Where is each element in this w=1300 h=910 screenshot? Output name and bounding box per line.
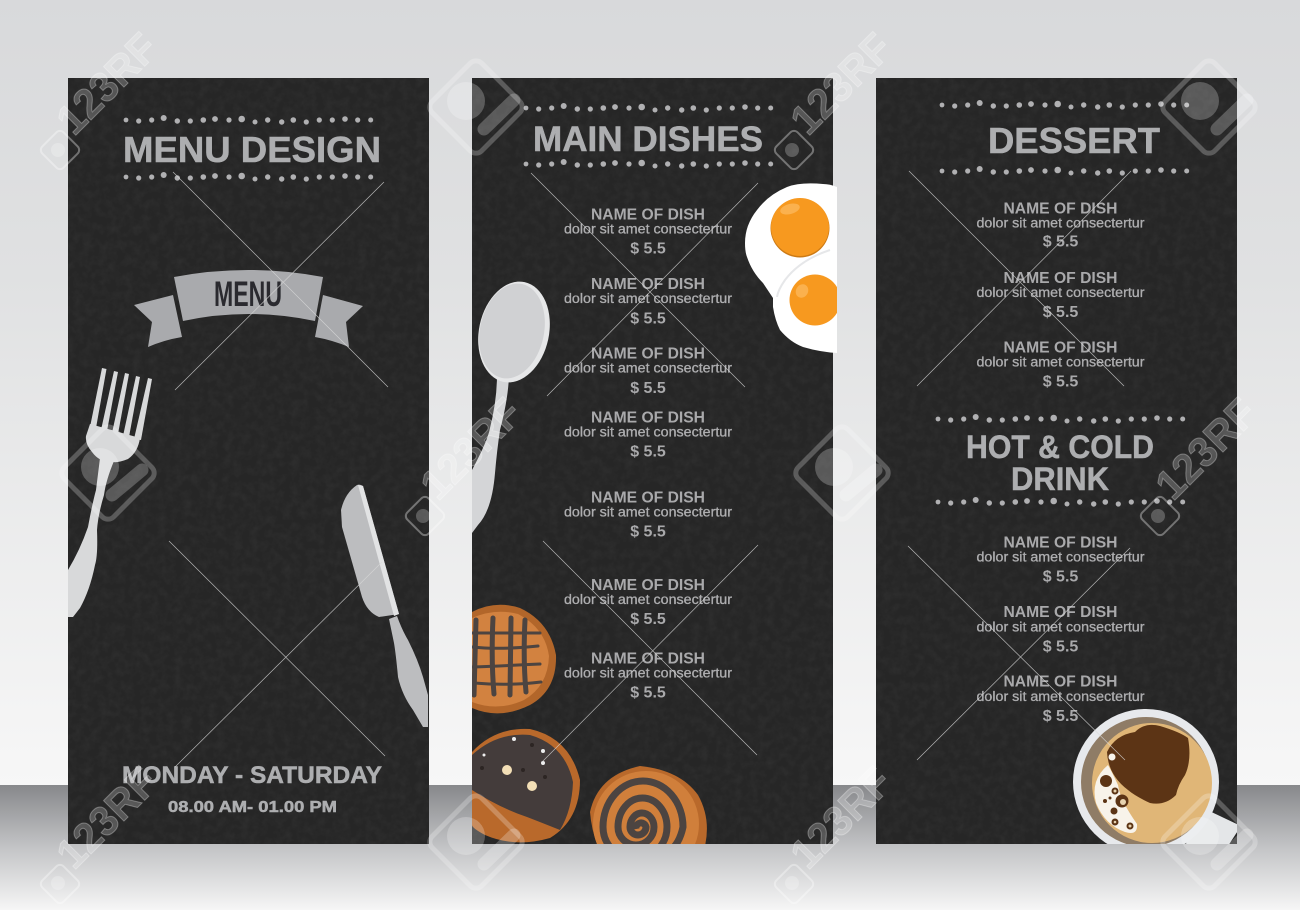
dessert 3: $ 5.5 <box>1043 374 1078 390</box>
drink 3: NAME OF DISH <box>1004 674 1118 690</box>
icon: coffee cup <box>1073 709 1241 855</box>
icon: knife <box>341 485 428 727</box>
dessert list <box>976 200 1145 390</box>
heading: dessert: DESSERT <box>988 120 1160 161</box>
dish 7: NAME OF DISH <box>591 651 705 668</box>
egg yolk 1 <box>770 198 830 258</box>
dessert 1: NAME OF DISH <box>1004 200 1118 218</box>
icon: fried eggs <box>745 183 840 353</box>
dish 3: NAME OF DISH <box>591 346 705 363</box>
dish 2: $ 5.5 <box>630 311 666 328</box>
main dishes placeholder cross lines <box>531 173 758 762</box>
icon: waffle cookie <box>472 605 556 713</box>
dish 6: NAME OF DISH <box>591 577 705 594</box>
dessert placeholder cross lines <box>908 171 1131 760</box>
dish 6: dolor sit amet consectertur <box>564 592 733 607</box>
bottom dotted divider <box>124 172 373 182</box>
icon: cinnamon roll <box>590 766 707 844</box>
top dotted divider <box>940 100 1189 110</box>
panel: menu cover <box>68 78 429 844</box>
dish 7 <box>564 651 733 702</box>
drink 3 <box>976 674 1145 725</box>
drink 3: dolor sit amet consectertur <box>976 689 1145 704</box>
dish 4: dolor sit amet consectertur <box>564 425 733 440</box>
dish 6 <box>564 577 733 628</box>
heading: hot and cold drink: HOT & COLD <box>966 429 1154 465</box>
icon: spoon <box>472 282 550 533</box>
dessert 2: $ 5.5 <box>1043 304 1078 321</box>
watermark top mid right: 123RF <box>781 24 901 143</box>
watermark bottom right <box>1160 793 1258 891</box>
dish 7: dolor sit amet consectertur <box>564 666 733 681</box>
hours: MONDAY - SATURDAY <box>122 762 382 789</box>
floor <box>0 785 1300 910</box>
heading: hot and cold drink: DRINK <box>1011 461 1109 497</box>
watermark middle far right: 123RF <box>1146 389 1266 508</box>
drink 1: $ 5.5 <box>1043 568 1078 586</box>
dessert 3: NAME OF DISH <box>1004 340 1118 356</box>
lower dotted divider for drinks <box>936 497 1185 507</box>
dotted divider below dessert <box>940 166 1189 176</box>
dish 1: NAME OF DISH <box>591 207 705 224</box>
watermark middle center: 123RF <box>411 389 531 508</box>
top dotted divider <box>124 115 373 125</box>
bottom dotted divider <box>524 159 773 169</box>
watermark bottom center <box>427 793 525 891</box>
dessert 2: dolor sit amet consectertur <box>976 285 1145 300</box>
upper dotted divider for drinks <box>936 414 1185 424</box>
dish 3 <box>564 346 733 397</box>
drink 2: dolor sit amet consectertur <box>976 620 1145 634</box>
drink 3: $ 5.5 <box>1043 708 1078 725</box>
drink 1 <box>976 534 1145 586</box>
drink list <box>976 534 1145 725</box>
dish 5: dolor sit amet consectertur <box>564 505 733 520</box>
cover placeholder cross lines <box>169 172 388 767</box>
dish list <box>564 207 733 702</box>
dish 6: $ 5.5 <box>630 611 666 628</box>
heading: menu design: MENU DESIGN <box>123 129 381 170</box>
drink 2: $ 5.5 <box>1043 638 1078 656</box>
dish 5: $ 5.5 <box>630 524 666 541</box>
opening time: 08.00 AM- 01.00 PM <box>168 799 337 816</box>
dish 5: NAME OF DISH <box>591 490 705 507</box>
dish 2: NAME OF DISH <box>591 276 705 293</box>
watermark middle left <box>59 424 157 522</box>
watermark bottom mid right: 123RF <box>781 758 901 877</box>
ribbon banner <box>134 270 363 347</box>
dessert 2 <box>976 270 1145 321</box>
icon: chocolate donut <box>472 729 580 842</box>
watermark bottom left: 123RF <box>47 758 167 877</box>
heading: main dishes: MAIN DISHES <box>533 120 763 159</box>
dessert 1: $ 5.5 <box>1043 234 1078 250</box>
dish 7: $ 5.5 <box>630 685 666 702</box>
watermark top left: 123RF <box>47 24 167 143</box>
panel: dessert and drinks <box>876 78 1241 855</box>
icon: fork <box>68 368 152 617</box>
dish 3: dolor sit amet consectertur <box>564 361 733 376</box>
dessert 2: NAME OF DISH <box>1004 270 1118 287</box>
dish 5 <box>564 490 733 541</box>
egg yolk 2 <box>790 274 840 326</box>
ribbon label: MENU <box>214 275 282 314</box>
drink 1: NAME OF DISH <box>1004 534 1118 552</box>
dessert 3 <box>976 340 1145 390</box>
watermark top center <box>427 58 525 156</box>
drink 2: NAME OF DISH <box>1004 604 1118 621</box>
dish 1 <box>564 207 733 258</box>
top dotted divider <box>524 103 773 113</box>
drink 1: dolor sit amet consectertur <box>976 550 1145 564</box>
dessert 1 <box>976 200 1145 250</box>
dish 4: $ 5.5 <box>630 444 666 461</box>
drink 2 <box>976 604 1145 656</box>
dessert 1: dolor sit amet consectertur <box>976 216 1145 230</box>
dish 2: dolor sit amet consectertur <box>564 291 733 306</box>
panel: main dishes <box>469 78 833 877</box>
dish 4: NAME OF DISH <box>591 410 705 427</box>
watermark middle right <box>793 424 891 522</box>
dish 4 <box>564 410 733 461</box>
dish 2 <box>564 276 733 328</box>
dish 1: $ 5.5 <box>630 241 666 258</box>
dish 3: $ 5.5 <box>630 380 666 397</box>
dessert 3: dolor sit amet consectertur <box>976 354 1145 370</box>
watermark top right <box>1160 58 1258 156</box>
dish 1: dolor sit amet consectertur <box>564 222 733 237</box>
